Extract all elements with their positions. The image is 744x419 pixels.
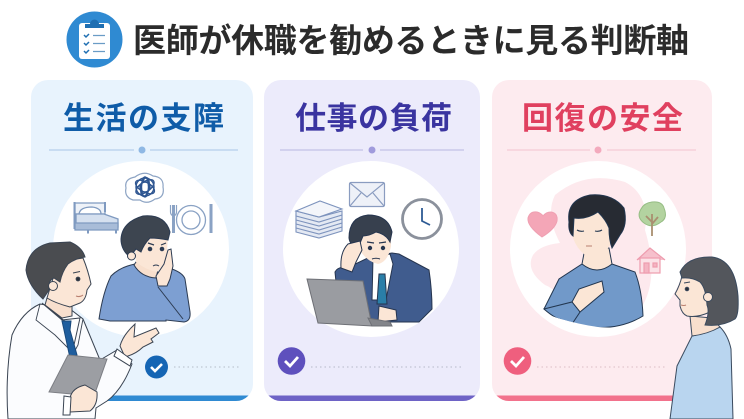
white coat [7, 304, 132, 419]
title: 医師が休職を勧めるときに見る判断軸 [133, 22, 689, 59]
icon: tangled thoughts cloud [126, 173, 163, 202]
tablet [49, 355, 107, 396]
checkmark [145, 356, 168, 378]
panel: 回復の安全 [492, 80, 712, 402]
divider [49, 146, 238, 154]
person: overworked office worker [335, 215, 432, 322]
icon: clock [402, 200, 442, 238]
checkmark [278, 347, 305, 375]
hair [26, 242, 85, 299]
heading: 回復の安全: 回復の安全 [522, 101, 683, 136]
checkmark [504, 347, 531, 375]
panel: 生活の支障 [31, 80, 253, 402]
icon: house [637, 248, 665, 273]
pink background blob [531, 178, 651, 322]
person: worried patient [99, 216, 190, 322]
dotted line placeholder [311, 366, 461, 368]
illustration circle [510, 161, 686, 337]
panel: 仕事の負荷 [264, 80, 480, 402]
title icon: clipboard checklist [66, 12, 122, 68]
icon: stack of papers [296, 201, 342, 238]
dotted line placeholder [537, 366, 665, 368]
icon: plate and cutlery [170, 204, 211, 234]
neck [45, 298, 72, 318]
divider [280, 146, 464, 154]
heading: 仕事の負荷: 仕事の負荷 [295, 101, 452, 136]
divider [507, 146, 696, 154]
icon: laptop [307, 279, 392, 326]
person: woman listening [670, 257, 738, 419]
illustration circle [283, 161, 459, 337]
icon: bed [74, 202, 118, 234]
icon: heart [528, 212, 557, 237]
icon: tree [639, 202, 665, 236]
icon: envelope [350, 182, 384, 206]
person: doctor in white coat [7, 242, 159, 419]
face [47, 258, 91, 307]
person: calm patient [544, 195, 643, 328]
illustration circle [53, 161, 229, 337]
presenting hand [120, 324, 159, 357]
dotted line placeholder [174, 366, 241, 368]
holding hand [70, 385, 97, 412]
heading: 生活の支障: 生活の支障 [63, 101, 224, 136]
collar and tie [42, 303, 80, 345]
